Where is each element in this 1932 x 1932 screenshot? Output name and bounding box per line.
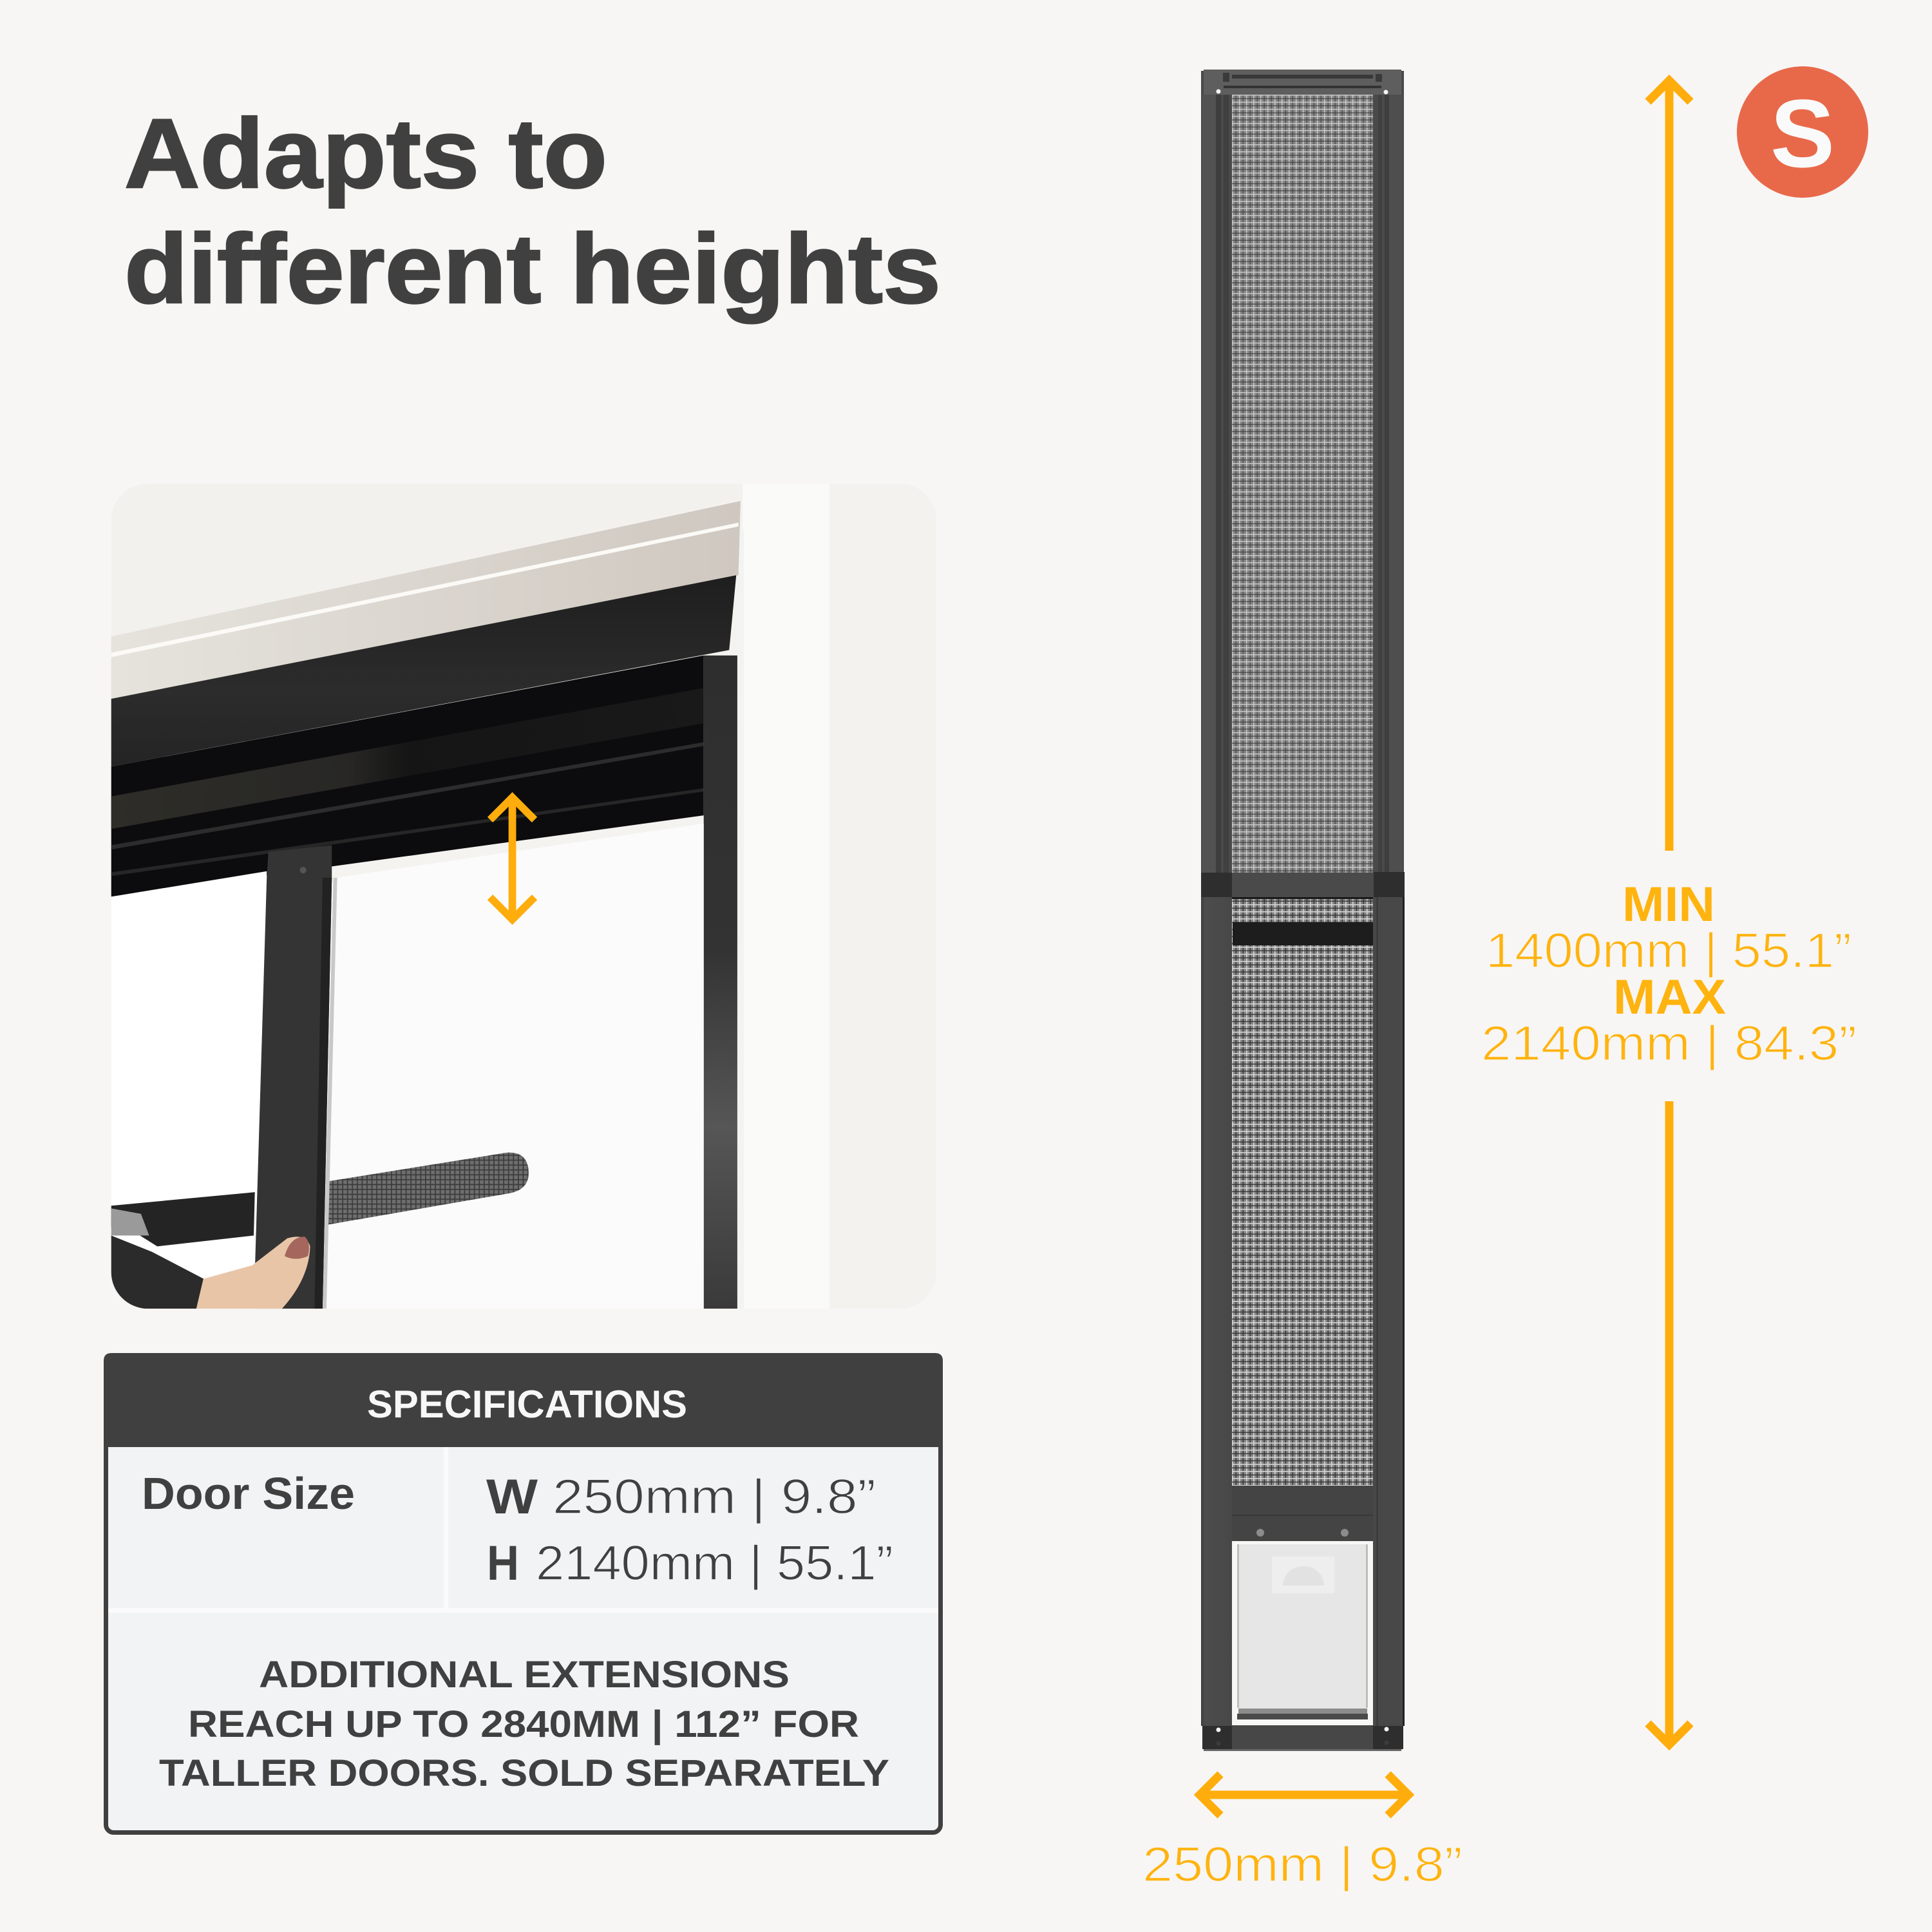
width arrow <box>1200 1774 1408 1815</box>
extensions note <box>159 1654 889 1794</box>
width label: 250mm | 9.8” <box>1142 1837 1463 1892</box>
flap logo <box>1272 1557 1334 1593</box>
lower door panel with screws <box>1232 1486 1373 1541</box>
height arrow: top segment <box>1648 80 1690 851</box>
size badge S <box>1737 66 1868 198</box>
min and max height labels <box>1481 877 1857 1071</box>
min and max height labels: 2140mm | 84.3” <box>1481 1016 1857 1071</box>
height arrow: bottom segment <box>1648 1101 1690 1745</box>
row value: height: 2140mm | 55.1” <box>536 1536 893 1591</box>
min and max height labels: 1400mm | 55.1” <box>1486 923 1852 978</box>
table header <box>104 1353 943 1447</box>
title: different heights <box>124 214 941 324</box>
specifications table <box>104 1353 943 1833</box>
table header: SPECIFICATIONS <box>367 1383 687 1426</box>
icon: vertical arrow on photo <box>490 797 535 920</box>
row value: height: H <box>487 1536 519 1591</box>
title <box>124 99 941 324</box>
row value: width: 250mm | 9.8” <box>553 1470 876 1524</box>
lower door section <box>1201 897 1405 1726</box>
door product image <box>1201 70 1405 1751</box>
bottom rail <box>1202 1725 1403 1751</box>
photo: door frame with adjustable screen <box>111 501 741 1309</box>
sliding post <box>254 845 332 1309</box>
row label: door size: Door Size <box>142 1468 355 1519</box>
pet flap <box>1232 1541 1373 1725</box>
extensions note: TALLER DOORS. SOLD SEPARATELY <box>159 1752 889 1794</box>
extensions note: ADDITIONAL EXTENSIONS <box>259 1654 790 1696</box>
title: Adapts to <box>124 99 607 209</box>
middle joint band <box>1201 872 1405 897</box>
extensions note: REACH UP TO 2840MM | 112” FOR <box>188 1703 859 1745</box>
row value: width: W <box>486 1470 538 1524</box>
min and max height labels: MAX <box>1613 970 1726 1025</box>
min and max height labels: MIN <box>1622 877 1715 932</box>
size badge S: S <box>1770 79 1835 187</box>
hand <box>196 1236 310 1309</box>
upper door section <box>1201 70 1404 873</box>
blurred handle seen through mesh <box>328 1153 529 1225</box>
